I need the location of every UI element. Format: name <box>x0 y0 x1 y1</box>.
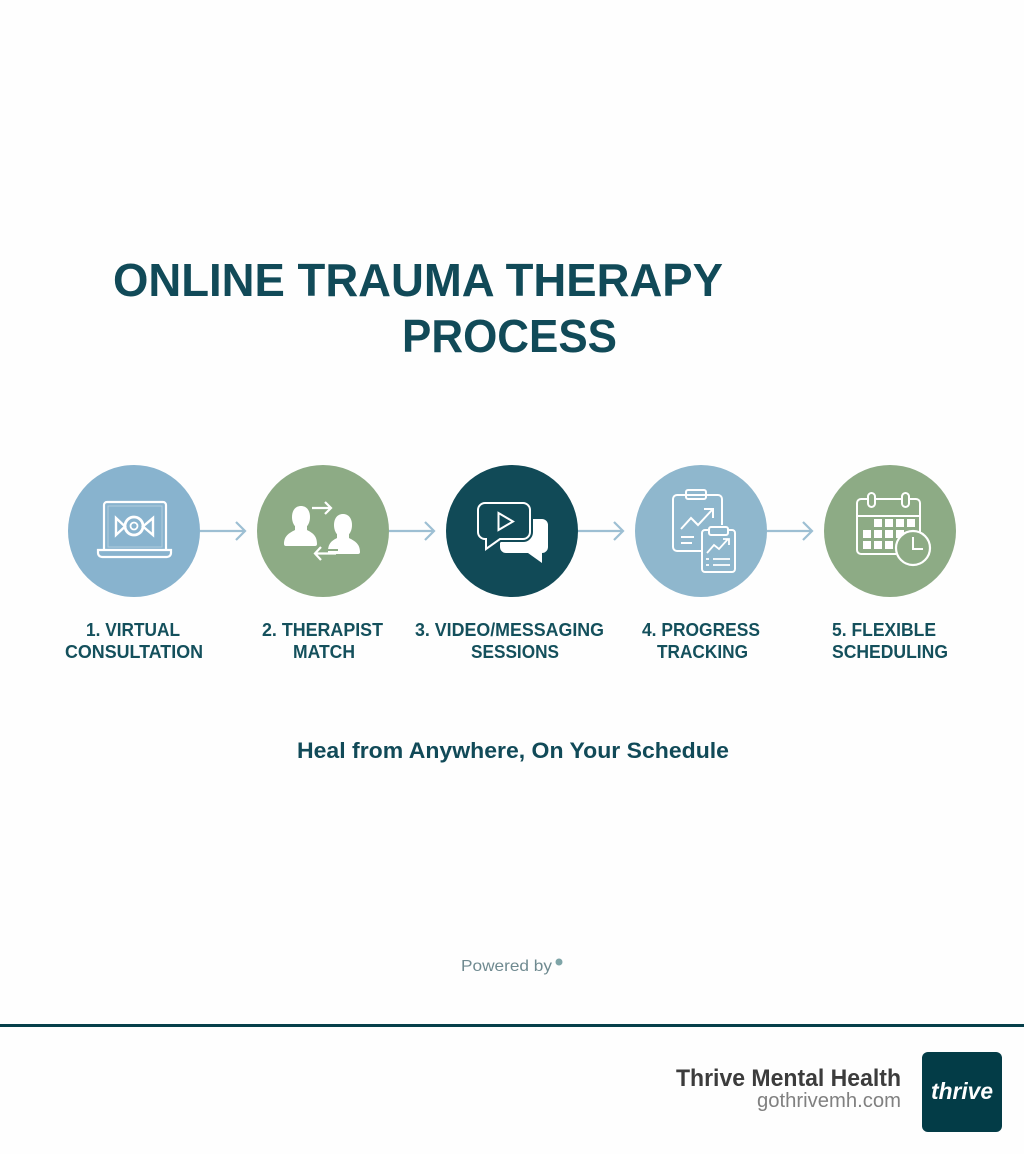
footer website: gothrivemh.com <box>757 1090 901 1112</box>
step 4: progress tracking <box>635 465 767 597</box>
step 1: virtual consultation <box>68 465 200 597</box>
step 4 label <box>642 620 760 662</box>
powered by note: Powered by <box>461 958 552 975</box>
step 5 label: 5. FLEXIBLE <box>832 620 936 640</box>
step 2 label: MATCH <box>293 642 355 662</box>
step 1 label: CONSULTATION <box>65 642 203 662</box>
title: ONLINE TRAUMA THERAPY <box>113 254 723 306</box>
arrow: step 1 to 2 <box>200 522 245 540</box>
step 4 label: 4. PROGRESS <box>642 620 760 640</box>
step 3 label <box>415 620 604 662</box>
icon: laptop with video <box>98 502 171 557</box>
tagline: Heal from Anywhere, On Your Schedule <box>297 738 729 763</box>
circle: step 2 <box>257 465 389 597</box>
arrow: step 4 to 5 <box>767 522 812 540</box>
arrow: step 2 to 3 <box>389 522 434 540</box>
circle: step 4 <box>635 465 767 597</box>
icon: two people with swap arrows <box>284 502 360 560</box>
logo: thrive <box>931 1078 993 1104</box>
title: PROCESS <box>402 310 617 362</box>
circle: step 3 <box>446 465 578 597</box>
title <box>113 254 723 362</box>
logo <box>922 1052 1002 1132</box>
step 4 label: TRACKING <box>657 642 748 662</box>
icon: chat bubbles with play button <box>478 503 548 563</box>
step 1 label: 1. VIRTUAL <box>86 620 180 640</box>
circle: step 1 <box>68 465 200 597</box>
step 3 label: 3. VIDEO/MESSAGING <box>415 620 604 640</box>
step 2 label: 2. THERAPIST <box>262 620 383 640</box>
icon: calendar with clock <box>857 493 930 565</box>
arrow: step 3 to 4 <box>578 522 623 540</box>
step 2 label <box>262 620 383 662</box>
step 2: therapist match <box>257 465 389 597</box>
icon: clipboards with charts <box>673 490 735 572</box>
step 5 label: SCHEDULING <box>832 642 948 662</box>
circle: step 5 <box>824 465 956 597</box>
step 5: flexible scheduling <box>824 465 956 597</box>
footer brand name: Thrive Mental Health <box>676 1065 901 1092</box>
step 5 label <box>832 620 948 662</box>
step 1 label <box>65 620 203 662</box>
step 3 label: SESSIONS <box>471 642 559 662</box>
step 3: video and messaging sessions <box>446 465 578 597</box>
footer divider <box>0 1024 1024 1027</box>
